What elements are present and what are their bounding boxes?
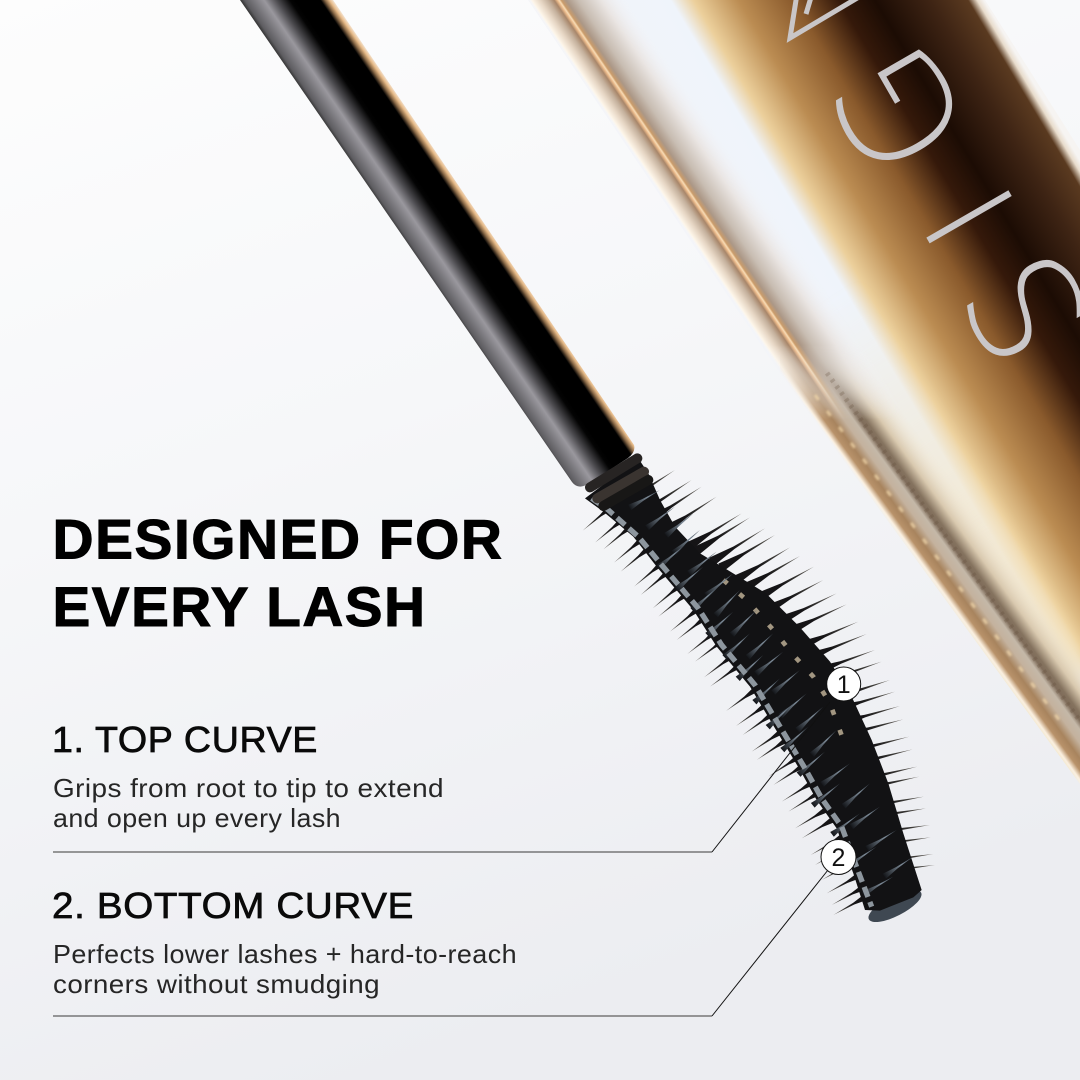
callout marker 2: 2 (832, 844, 845, 872)
callout marker 2 (821, 840, 856, 874)
tube logo triangle (790, 0, 864, 38)
title: DESIGNED FOR (52, 508, 504, 570)
title (52, 508, 504, 638)
section 1 heading: 1. TOP CURVE (52, 719, 318, 760)
callout marker 1 (827, 667, 861, 701)
brush body (585, 458, 922, 911)
bottom row of bristles (581, 503, 868, 918)
ferrule rings (590, 458, 648, 506)
tube lettering (796, 15, 1080, 391)
callout line 1 (53, 702, 830, 852)
mascara tube (500, 0, 1080, 820)
brush tip (864, 884, 926, 928)
callout marker 1: 1 (837, 671, 851, 699)
section 2 description: corners without smudging (53, 969, 380, 999)
tube lettering: G (796, 15, 1005, 202)
mascara wand handle (240, 0, 634, 487)
mascara brush (581, 458, 936, 928)
section 2 heading: 2. BOTTOM CURVE (52, 885, 414, 926)
title: EVERY LASH (52, 575, 426, 638)
top row of bristles (619, 466, 936, 877)
section 2 description: Perfects lower lashes + hard-to-reach (53, 939, 517, 969)
stair-step highlights on lower edge (592, 498, 872, 907)
section 1 description: and open up every lash (53, 803, 341, 833)
section 1 description (53, 773, 444, 833)
section 1 description: Grips from root to tip to extend (53, 773, 444, 803)
tube lettering: I (896, 161, 1046, 270)
callout line 2 (53, 870, 828, 1016)
inner bristle highlights (628, 487, 915, 897)
light gaps between curves (723, 580, 843, 740)
section 2 description (53, 939, 517, 999)
